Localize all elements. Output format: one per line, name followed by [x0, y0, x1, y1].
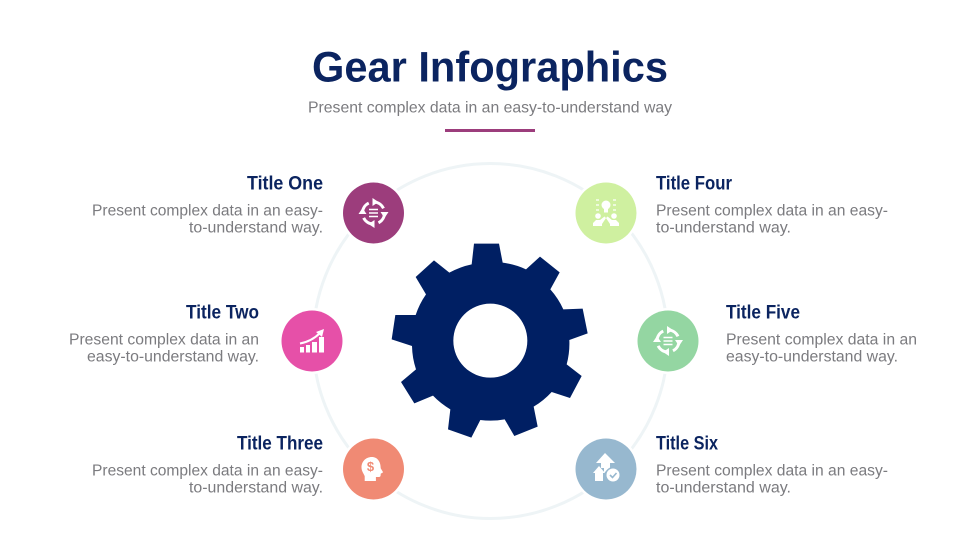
item: Title One: [92, 174, 323, 236]
title underline: [445, 129, 535, 132]
item: Title Five: Title Five: [726, 302, 800, 324]
item: Title Three: Present complex data in an easy-: [92, 462, 323, 480]
item: Title Two: Title Two: [186, 302, 259, 324]
item: Title Two: [69, 302, 259, 366]
item: Title Six: Present complex data in an easy-: [656, 462, 888, 480]
item: Title Two: Present complex data in an: [69, 332, 259, 348]
item: Title Four: to-understand way.: [656, 220, 791, 236]
item: Title Four: Present complex data in an easy-: [656, 202, 888, 220]
item: Title Three: [92, 434, 323, 496]
item: Title Two: easy-to-understand way.: [87, 348, 259, 366]
item: Title Five: [726, 302, 917, 366]
item: Title One: to-understand way.: [189, 220, 323, 236]
item: Title Five: Present complex data in an: [726, 332, 917, 348]
item: Title One: Present complex data in an easy-: [92, 202, 323, 220]
ring around gear: [313, 164, 668, 518]
icon: process cycle, Title Five: [638, 310, 698, 372]
icon: head with dollar, Title Three: $: [367, 459, 375, 474]
icon: process cycle, Title One: [343, 182, 404, 244]
central gear: [392, 244, 588, 438]
item: Title Six: to-understand way.: [656, 480, 791, 496]
subtitle: Present complex data in an easy-to-understand way: [308, 100, 672, 116]
item: Title Three: to-understand way.: [189, 480, 323, 496]
item: Title Six: Title Six: [656, 434, 718, 454]
icon: idea with people, Title Four: [576, 182, 636, 244]
icon: growth chart, Title Two: [282, 310, 342, 372]
item: Title Three: Title Three: [237, 434, 323, 454]
item: Title One: Title One: [247, 174, 323, 194]
item: Title Six: [656, 434, 888, 496]
item: Title Five: easy-to-understand way.: [726, 348, 898, 366]
item: Title Four: Title Four: [656, 174, 733, 194]
icon: up arrows with check, Title Six: [576, 438, 636, 500]
icon: head with dollar, Title Three: [343, 438, 404, 500]
title: Gear Infographics: [312, 44, 668, 92]
item: Title Four: [656, 174, 888, 236]
